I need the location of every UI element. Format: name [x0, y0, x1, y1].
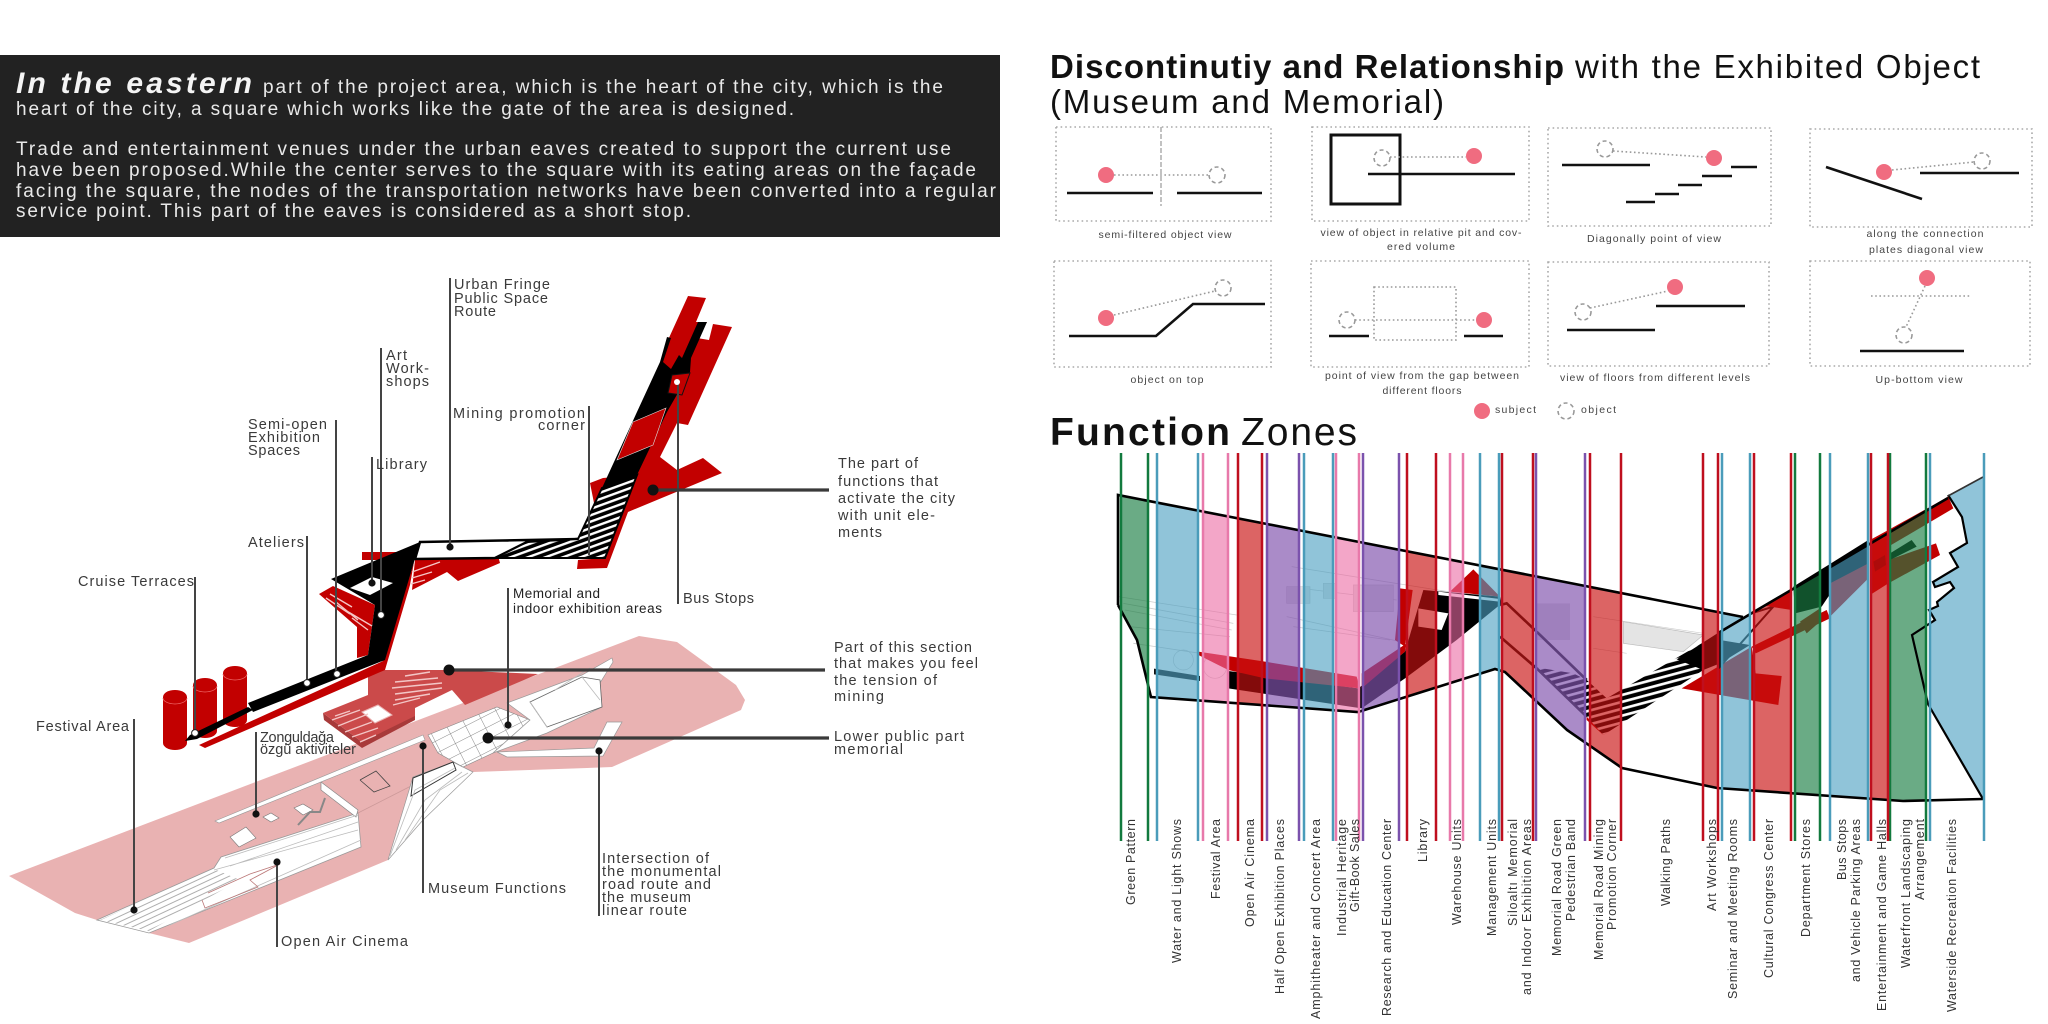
callout: urban fringe public space route: Route: [454, 304, 496, 320]
chart: rotated zone labels: Amphitheater and Concert Area: [1309, 819, 1323, 1019]
diagram: up-bottom view: Up-bottom view: [1876, 374, 1963, 386]
callout: festival area: Festival Area: [36, 719, 130, 735]
chart: rotated zone labels: Siloaltı Memorial: [1506, 819, 1520, 926]
callout: functions that activate the city: [648, 456, 956, 541]
chart: coloured function zone bands: [1121, 470, 1984, 810]
text panel: eastern area description: part of the project area, which is the heart of the city, which is the: [263, 77, 943, 98]
callout: intersection of routes: Intersection of: [602, 851, 710, 867]
callout: memorial and indoor exhibition areas: [504, 586, 662, 729]
callout: semi-open exhibition spaces: [248, 417, 340, 677]
diagram: semi-filtered object view: [1056, 127, 1271, 241]
heading: discontinuity and relationship: (Museum and Memorial): [1050, 83, 1444, 120]
chart: zone outline: [1118, 477, 1983, 801]
diagram: object on top: [1054, 261, 1271, 386]
callout: intersection of routes: linear route: [602, 903, 687, 919]
diagram: relative pit and covered volume: [1312, 127, 1529, 253]
plaza: mining tension section: [323, 670, 538, 748]
callout: ateliers: [248, 535, 310, 686]
text panel: eastern area description: heart of the city, a square which works like the gate of the area is designed.: [16, 99, 794, 120]
callout: museum functions: [419, 742, 566, 897]
chart: rotated zone labels: Open Air Cinema: [1243, 819, 1257, 927]
callout: lower public part memorial: [482, 729, 964, 758]
chart: rotated zone labels: Bus Stops: [1835, 819, 1849, 880]
axonometric diagram: lower ground level: [9, 636, 745, 943]
chart: rotated zone labels: [1124, 818, 1959, 1019]
callout: art workshops: shops: [386, 374, 429, 390]
diagram: along the connection plates diagonal view: along the connection: [1866, 228, 1984, 240]
chart: rotated zone labels: Industrial Heritage: [1335, 819, 1349, 936]
diagram: along the connection plates diagonal view: [1810, 129, 2032, 256]
diagram: relative pit and covered volume: ered volume: [1387, 241, 1455, 253]
callout: ateliers: Ateliers: [248, 535, 304, 551]
diagram: diagonally point of view: Diagonally point of view: [1587, 233, 1721, 245]
callout: lower public part memorial: memorial: [834, 742, 903, 758]
chart: rotated zone labels: Promotion Corner: [1605, 819, 1619, 930]
diagram: diagonally point of view: [1548, 128, 1771, 245]
callout: art workshops: [378, 348, 429, 618]
heading: function zones: Function: [1050, 411, 1230, 454]
callout: tension of mining: mining: [834, 689, 884, 705]
callout: bus stops: Bus Stops: [683, 591, 754, 607]
text panel: eastern area description: Trade and entertainment venues under the urban eaves created to support the current use: [16, 139, 951, 160]
callout: functions that activate the city: functions that: [838, 474, 938, 490]
callout: functions that activate the city: The part of: [838, 456, 919, 472]
callout: library: Library: [376, 457, 428, 473]
callout: art workshops: Art: [386, 348, 407, 364]
callout: festival area: [36, 719, 138, 914]
callout: intersection of routes: the monumental: [602, 864, 721, 880]
diagram: gap between different floors: point of view from the gap between: [1325, 370, 1519, 382]
callout: mining promotion corner: [453, 406, 589, 555]
chart: rotated zone labels: Memorial Road Green: [1550, 819, 1564, 956]
chart: rotated zone labels: Warehouse Units: [1450, 819, 1464, 925]
callout: functions that activate the city: with unit ele-: [837, 508, 935, 524]
callout: memorial and indoor exhibition areas: indoor exhibition areas: [513, 601, 662, 616]
chart: rotated zone labels: Arrangement: [1913, 818, 1927, 900]
chart: zone boundary lines: [1121, 453, 1984, 841]
chart: rotated zone labels: Green Pattern: [1124, 819, 1138, 905]
chart: rotated zone labels: Festival Area: [1209, 819, 1223, 899]
chart: rotated zone labels: Department Stores: [1799, 819, 1813, 937]
chart: rotated zone labels: Management Units: [1485, 819, 1499, 936]
diagram: up-bottom view: [1810, 261, 2030, 386]
callout: urban fringe public space route: Public Space: [454, 291, 548, 307]
diagram: object on top: object on top: [1130, 374, 1204, 386]
diagram: view of floors from different levels: view of floors from different levels: [1560, 372, 1750, 384]
heading: discontinuity and relationship: [1050, 48, 1980, 120]
callout: intersection of routes: road route and: [602, 877, 711, 893]
diagram: relative pit and covered volume: view of object in relative pit and cov-: [1320, 227, 1522, 239]
text panel: eastern area description: facing the square, the nodes of the transportation networks have been converted into a regular: [16, 181, 997, 202]
chart: rotated zone labels: Library: [1416, 818, 1430, 862]
callout: cruise terraces: Cruise Terraces: [78, 574, 194, 590]
chart: rotated zone labels: Gift-Book Sales: [1348, 819, 1362, 912]
callout: semi-open exhibition spaces: Exhibition: [248, 430, 320, 446]
heading: function zones: [1050, 411, 1357, 454]
chart: rotated zone labels: and Indoor Exhibition Areas: [1520, 819, 1534, 995]
callout: library: [368, 457, 428, 587]
diagram: view of floors from different levels: [1548, 262, 1769, 384]
chart: rotated zone labels: Waterfront Landscaping: [1899, 819, 1913, 968]
callout: open air cinema: [273, 858, 409, 950]
text panel: eastern area description: have been proposed.While the center serves to the square with its eating areas on the façade: [16, 160, 976, 181]
chart: rotated zone labels: Memorial Road Mining: [1592, 819, 1606, 960]
callout: tension of mining: the tension of: [834, 673, 938, 689]
legend: subject and object: [1474, 403, 1616, 419]
legend: subject and object: object: [1581, 404, 1616, 416]
diagram: along the connection plates diagonal view: plates diagonal view: [1869, 244, 1983, 256]
callout: open air cinema: Open Air Cinema: [281, 934, 409, 950]
callout: mining promotion corner: corner: [538, 418, 585, 434]
cylinders: cruise terraces: [163, 666, 247, 750]
callout: intersection of routes: the museum: [602, 890, 691, 906]
callout: intersection of routes: [595, 747, 721, 919]
callout: urban fringe public space route: Urban Fringe: [454, 277, 550, 293]
callout: zonguldak specific activities: Zonguldağa: [260, 730, 335, 746]
callout: zonguldak specific activities: [252, 730, 356, 818]
chart: rotated zone labels: and Vehicle Parking Areas: [1849, 819, 1863, 982]
diagram: semi-filtered object view: semi-filtered object view: [1098, 229, 1232, 241]
callout: functions that activate the city: ments: [838, 525, 882, 541]
diagram: gap between different floors: different floors: [1382, 385, 1462, 397]
text panel: eastern area description: service point. This part of the eaves is considered as a short stop.: [16, 201, 691, 222]
callout: functions that activate the city: activate the city: [838, 491, 956, 507]
callout: cruise terraces: [78, 574, 198, 736]
callout: bus stops: [674, 379, 754, 607]
callout: art workshops: Work-: [386, 361, 429, 377]
axonometric diagram: elevated red and black route: [185, 296, 732, 748]
callout: tension of mining: Part of this section: [834, 640, 972, 656]
legend: subject and object: subject: [1495, 404, 1536, 416]
diagram: gap between different floors: [1311, 261, 1529, 397]
chart: rotated zone labels: Seminar and Meeting Rooms: [1726, 819, 1740, 999]
chart: rotated zone labels: Cultural Congress Center: [1762, 819, 1776, 978]
callout: zonguldak specific activities: özgü aktiviteler: [260, 742, 356, 758]
chart: rotated zone labels: Research and Education Center: [1380, 819, 1394, 1016]
callout: urban fringe public space route: [446, 277, 550, 551]
text panel: eastern area description: [0, 55, 1000, 237]
callout: museum functions: Museum Functions: [428, 881, 566, 897]
heading: function zones: Zones: [1241, 411, 1357, 454]
chart: rotated zone labels: Art Workshops: [1705, 819, 1719, 911]
chart: rotated zone labels: Walking Paths: [1659, 819, 1673, 906]
callout: lower public part memorial: Lower public part: [834, 729, 964, 745]
text panel: eastern area description: In the eastern: [16, 67, 252, 100]
chart: rotated zone labels: Waterside Recreation Facilities: [1945, 819, 1959, 1012]
chart: rotated zone labels: Pedestrian Band: [1564, 819, 1578, 921]
callout: memorial and indoor exhibition areas: Memorial and: [513, 586, 600, 601]
callout: tension of mining: [444, 640, 978, 705]
chart: route plan behind the function zones: [1118, 497, 1953, 735]
heading: discontinuity and relationship: with the Exhibited Object: [1574, 48, 1980, 85]
chart: rotated zone labels: Entertainment and Game Halls: [1875, 819, 1889, 1011]
heading: discontinuity and relationship: Discontinutiy and Relationship: [1050, 48, 1564, 85]
callout: tension of mining: that makes you feel: [834, 656, 978, 672]
callout: mining promotion corner: Mining promotion: [453, 406, 585, 422]
chart: rotated zone labels: Half Open Exhibition Places: [1273, 819, 1287, 994]
callout: semi-open exhibition spaces: Semi-open: [248, 417, 327, 433]
callout: semi-open exhibition spaces: Spaces: [248, 443, 300, 459]
chart: rotated zone labels: Water and Light Shows: [1170, 819, 1184, 963]
